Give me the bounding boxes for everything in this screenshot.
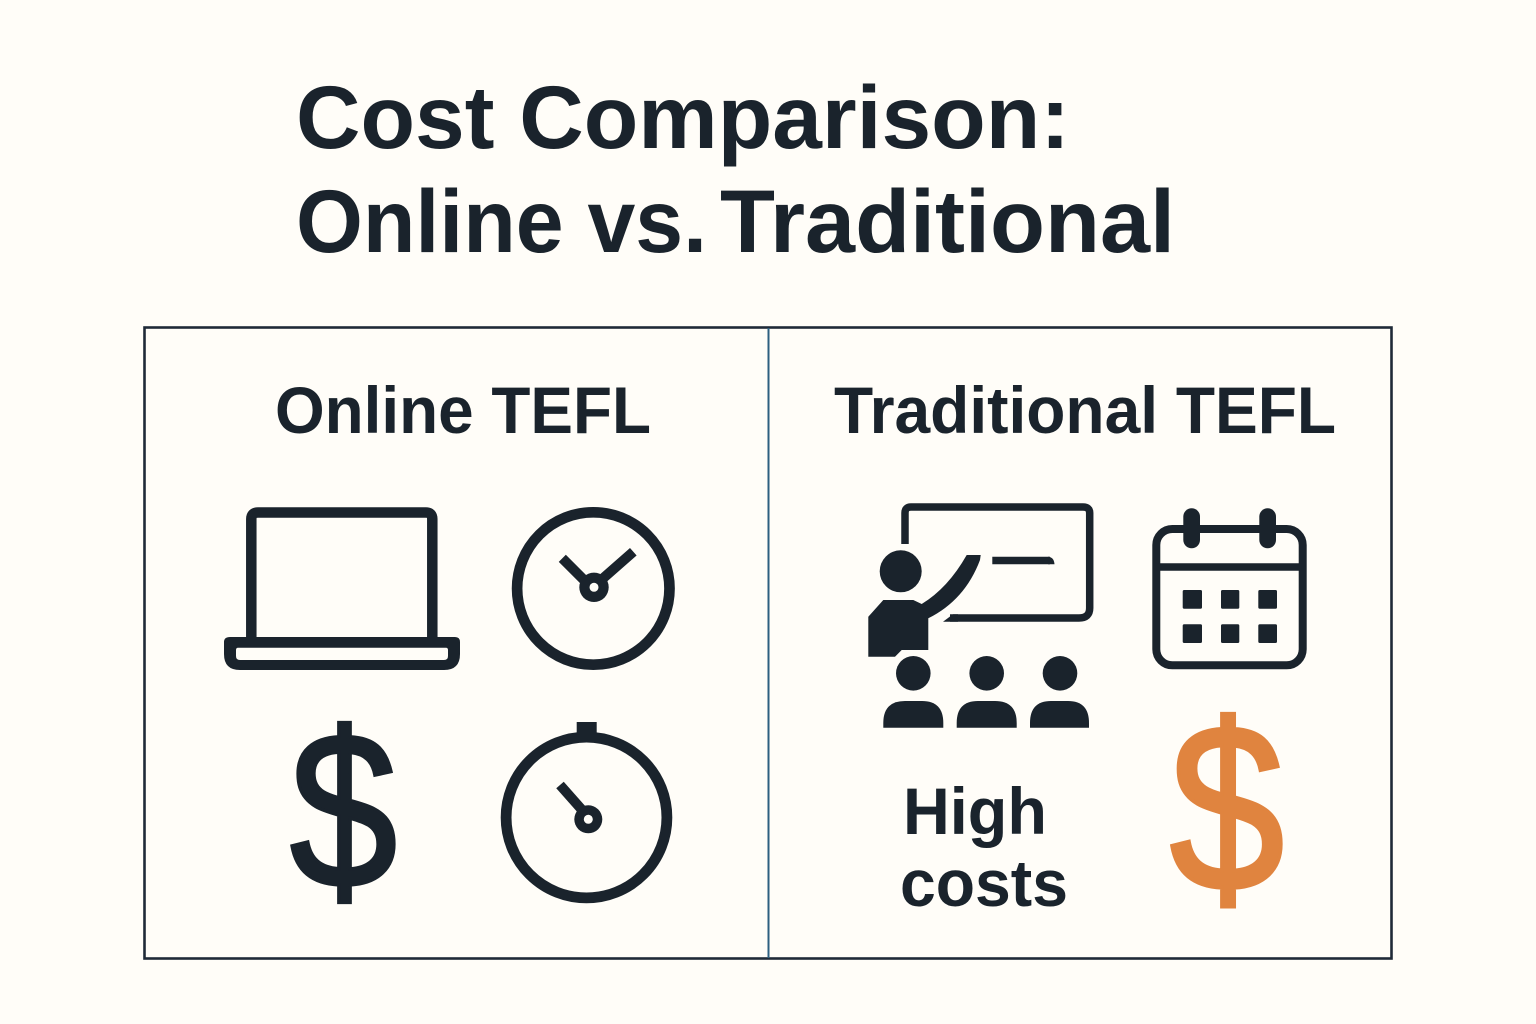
label: high costs: High [903, 774, 1047, 848]
icon: laptop [224, 512, 460, 670]
icon: orange dollar sign: $ [1170, 676, 1284, 941]
panel: online TEFL [224, 373, 670, 935]
label: high costs [900, 774, 1068, 920]
title: Online vs. [296, 171, 707, 271]
title: Cost Comparison: [296, 67, 1070, 167]
icon: clock [517, 512, 670, 665]
label: high costs: costs [900, 846, 1068, 920]
icon: calendar [1156, 508, 1303, 665]
title [296, 67, 1175, 271]
icon: stopwatch [506, 722, 667, 898]
heading: traditional TEFL: Traditional TEFL [834, 373, 1336, 447]
panel: comparison frame [144, 328, 1392, 958]
icon: dollar sign: $ [290, 687, 397, 935]
panel: traditional TEFL [834, 373, 1336, 941]
icon: teacher and classroom [868, 507, 1090, 728]
title: Traditional [720, 171, 1175, 271]
heading: online TEFL: Online TEFL [275, 373, 651, 447]
